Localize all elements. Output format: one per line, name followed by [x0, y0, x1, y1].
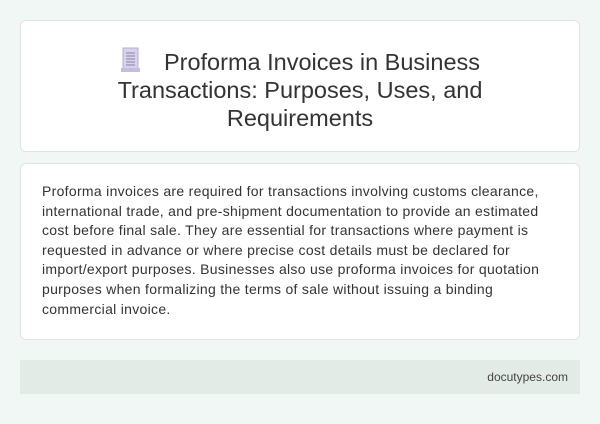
title: [118, 48, 482, 131]
title: Proforma Invoices in Business: [164, 49, 480, 75]
title: Transactions: Purposes, Uses, and: [118, 77, 482, 103]
title card: [20, 20, 580, 152]
footer: [20, 360, 580, 394]
icon: document: [121, 48, 140, 72]
description card: [20, 163, 580, 340]
description text: Proforma invoices are required for transactions involving customs clearance, international trade, and pre-shipment documentation to provide an estimated cost before final sale. They are essential for transactions where payment is requested in advance or where precise cost details must be declared for import/export purposes. Businesses also use proforma invoices for quotation purposes when formalizing the terms of sale without issuing a binding commercial invoice.: [42, 183, 539, 317]
title: Requirements: [227, 105, 373, 131]
footer: docutypes.com: [487, 370, 568, 384]
